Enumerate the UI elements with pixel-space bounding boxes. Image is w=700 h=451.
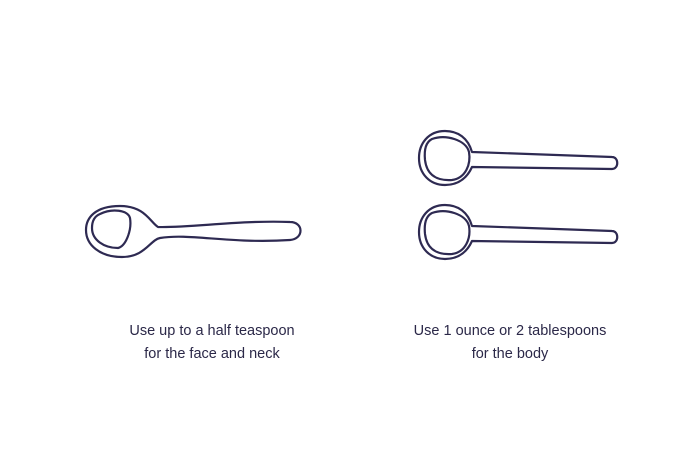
caption: teaspoon: Use up to a half teaspoon (129, 323, 295, 339)
icon: tablespoon bottom (419, 205, 617, 259)
caption: tablespoons (414, 323, 606, 362)
icon: tablespoon top (419, 131, 617, 185)
caption: teaspoon: for the face and neck (144, 346, 280, 362)
caption: tablespoons: for the body (472, 346, 548, 362)
icon: teaspoon (86, 206, 300, 257)
caption: tablespoons: Use 1 ounce or 2 tablespoons (414, 323, 606, 339)
caption: teaspoon (129, 323, 295, 362)
